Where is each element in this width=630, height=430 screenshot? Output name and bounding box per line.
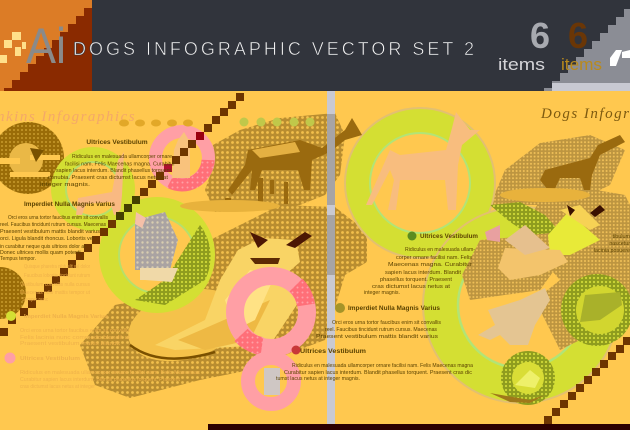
left text block 2: Orci eros urna tortor faucibus enim sit convallis bbox=[8, 215, 108, 221]
left faded text: Imperdiet Nulla Magnis Varius bbox=[24, 314, 108, 320]
icon: floor ellipse bbox=[180, 200, 280, 212]
light strip bbox=[552, 83, 630, 91]
left text block 2: reel. Faucibus tincidunt rutrum cursus. Maecenas bbox=[0, 222, 106, 228]
left faded text: Orci eros urna tortor faucibus enim sit convallis bbox=[20, 328, 130, 334]
icon: top dog bbox=[225, 118, 362, 208]
hatch under bottom circle bbox=[490, 393, 545, 403]
golden inner field bbox=[120, 277, 250, 373]
right text block 2: reel. Faucibus tincidunt rutrum cursus. Maecenas bbox=[325, 327, 437, 333]
left faded text: Curabitur sapien lacus interdum. Blandit phasellus torquent. Praesent bbox=[20, 377, 180, 383]
icon: pale checker bbox=[0, 32, 26, 63]
left faded text bbox=[20, 264, 200, 390]
hatched panel: golden dog bbox=[80, 205, 367, 398]
stepped dark triangle bbox=[4, 8, 92, 91]
icon: badge right 1 bbox=[408, 232, 416, 240]
right text block 1: sapien lacus interdum. Blandit bbox=[385, 270, 461, 276]
green circle: bottom bbox=[501, 351, 555, 405]
right text block 1: integer magnis. bbox=[364, 290, 400, 296]
icon: right top dog bbox=[500, 135, 625, 202]
green ring: left large bbox=[109, 207, 211, 305]
diagonal squares right bbox=[544, 337, 630, 424]
left faded text: Semper nunc bbox=[22, 297, 48, 303]
hatched panel: green upper bbox=[490, 202, 560, 235]
left lower hatch circle bbox=[0, 267, 26, 319]
icon: peach standing dog bbox=[366, 112, 480, 210]
far right text: nascetur bbox=[609, 241, 630, 247]
left faded text: cras dictumst lacus netus at integer bbox=[20, 384, 95, 390]
green ring: left small bbox=[51, 147, 135, 231]
left text block 2: in curabitur neque quis ultrices dolor ac. bbox=[0, 244, 88, 250]
icon: golden dog bbox=[155, 232, 312, 350]
logo Ai: Ai bbox=[26, 18, 66, 74]
right text block 3: Curabitur sapien lacus interdum. Blandit phasellus torquent. Praesent cras dic bbox=[284, 370, 472, 376]
right text block 2: Praesent vestibulum mattis blandit varius bbox=[316, 334, 438, 340]
left text block 1 bbox=[40, 139, 175, 188]
count 6 gray: 6 bbox=[530, 15, 550, 56]
left text block 2: orci. Ligula blandit rhoncus. Lobortis vel bbox=[0, 236, 94, 242]
dark arc under golden dog bbox=[130, 345, 215, 359]
left faded text: Quisque pharetra nibh elit vel dolor bbox=[24, 264, 90, 270]
stepped gray triangle bbox=[544, 9, 630, 91]
icon: badge right 3 bbox=[292, 346, 300, 354]
center vertical bar bbox=[327, 91, 335, 430]
items orange: items bbox=[561, 55, 602, 74]
diagonal squares left bbox=[0, 93, 244, 336]
icon: pale dog in pink ring bbox=[172, 132, 190, 178]
count 6 orange: 6 bbox=[568, 15, 588, 56]
left faded text: Felis lacinia nunc commodo blandit ut bbox=[20, 335, 131, 341]
left text block 1: facilisi nam. Felis Maecenas magna. Curabitur bbox=[65, 162, 175, 168]
hatched panel: top dog bbox=[205, 113, 345, 212]
right text block 3 bbox=[276, 348, 474, 382]
hatched panel: lion right bbox=[520, 188, 630, 350]
right text block 1: corper ornare facilisi nam. Felis bbox=[396, 255, 472, 261]
left text block 1: sapien lacus interdum. Blandit phasellus torquent bbox=[56, 168, 171, 174]
right text block 3: tumst lacus netus at integer magnis. bbox=[276, 376, 360, 382]
right text block 2 bbox=[316, 305, 441, 340]
right text block 2: Imperdiet Nulla Magnis Varius bbox=[348, 305, 440, 312]
left faded text: Vestibulum convallis nulla cursus bbox=[20, 282, 90, 288]
bar hatch overlap bbox=[327, 114, 335, 275]
green circle: right bbox=[561, 274, 630, 346]
green ring: right top bbox=[345, 108, 495, 258]
right text block 1: Maecenas magna. Curabitur bbox=[388, 262, 472, 268]
left faded text: Ridiculus en malesuada ullamcorper ornare facilisi nam. Felis Maecenas bbox=[20, 370, 200, 376]
left faded text: Ultrices Vestibulum bbox=[20, 356, 80, 362]
icon: gray dog small bbox=[264, 368, 280, 395]
items gray: items bbox=[498, 55, 545, 74]
right text block 3: Ridiculus en malesuada ullamcorper ornare facilisi nam. Felis Maecenas magna bbox=[292, 363, 474, 369]
far right text: lacinia posuere bbox=[594, 248, 630, 254]
left text block 2 bbox=[0, 201, 115, 262]
right text block 1: Ultrices Vestibulum bbox=[420, 233, 478, 240]
icon: left green badge bbox=[6, 311, 16, 321]
orange block bbox=[0, 0, 92, 91]
icon: badge right 2 bbox=[335, 303, 345, 313]
left text block 1: conubia. Praesent cras dictumst lacus netus at bbox=[48, 175, 168, 181]
right text block 1: cras dictumst lacus netus at bbox=[372, 284, 450, 290]
pink ring: center bbox=[235, 276, 307, 348]
far right text: tibulum bbox=[613, 234, 630, 240]
right text block 3: Ultrices Vestibulum bbox=[300, 348, 366, 355]
icon row: bowls bbox=[119, 120, 193, 126]
icon: white glyph bbox=[610, 50, 630, 66]
bottom dark bar bbox=[208, 424, 630, 430]
icon: hatched dog in ring bbox=[135, 212, 178, 282]
icon: beige dog bottom right bbox=[478, 288, 550, 345]
right text block 1: Ridiculus en malesuada ullam- bbox=[405, 247, 475, 253]
green ring: right bottom bbox=[423, 207, 619, 403]
hatched panel: right top dog bbox=[490, 135, 625, 205]
left text block 1: integer magnis. bbox=[40, 182, 91, 188]
hatched panel: body hatch bbox=[462, 235, 565, 300]
far right text bbox=[594, 234, 630, 254]
left text block 1: Ridiculus en malesuada ullamcorper ornare bbox=[72, 154, 172, 160]
left text block 1: Ultrices Vestibulum bbox=[86, 139, 148, 146]
right text block 1 bbox=[364, 233, 478, 296]
right text block 2: Orci eros urna tortor faucibus enim sit convallis bbox=[332, 320, 441, 326]
left text block 2: Tempus tempor. bbox=[0, 256, 36, 262]
right text block 1: phasellus torquent. Praesent bbox=[380, 277, 452, 283]
pink ring: small bbox=[248, 358, 294, 404]
left faded text: Maecenas odio mattis tempor ut bbox=[20, 290, 90, 296]
left text block 2: Praesent vestibulum mattis blandit varius bbox=[0, 229, 100, 235]
header bar bbox=[0, 0, 630, 91]
pink ring: top bbox=[156, 132, 208, 185]
left faded text: Faucibus lobortis tincidunt rutrum bbox=[24, 273, 90, 279]
left dark hatch circle bbox=[0, 122, 64, 194]
title: DOGS INFOGRAPHIC VECTOR SET 2 bbox=[73, 39, 474, 59]
left script heading: nkins Infographics bbox=[0, 109, 136, 125]
icon row: green dots bbox=[240, 118, 314, 126]
icon: left pink badge bbox=[4, 352, 16, 364]
left faded text: Praesent vestibulum mattis blandit bbox=[20, 341, 121, 347]
icon: pale dog left bbox=[76, 152, 124, 215]
left text block 2: Imperdiet Nulla Magnis Varius bbox=[24, 201, 115, 208]
icon: lion right bbox=[485, 205, 605, 280]
left text block 2: Donec ultrices mollis quam potenti. bbox=[0, 250, 82, 256]
